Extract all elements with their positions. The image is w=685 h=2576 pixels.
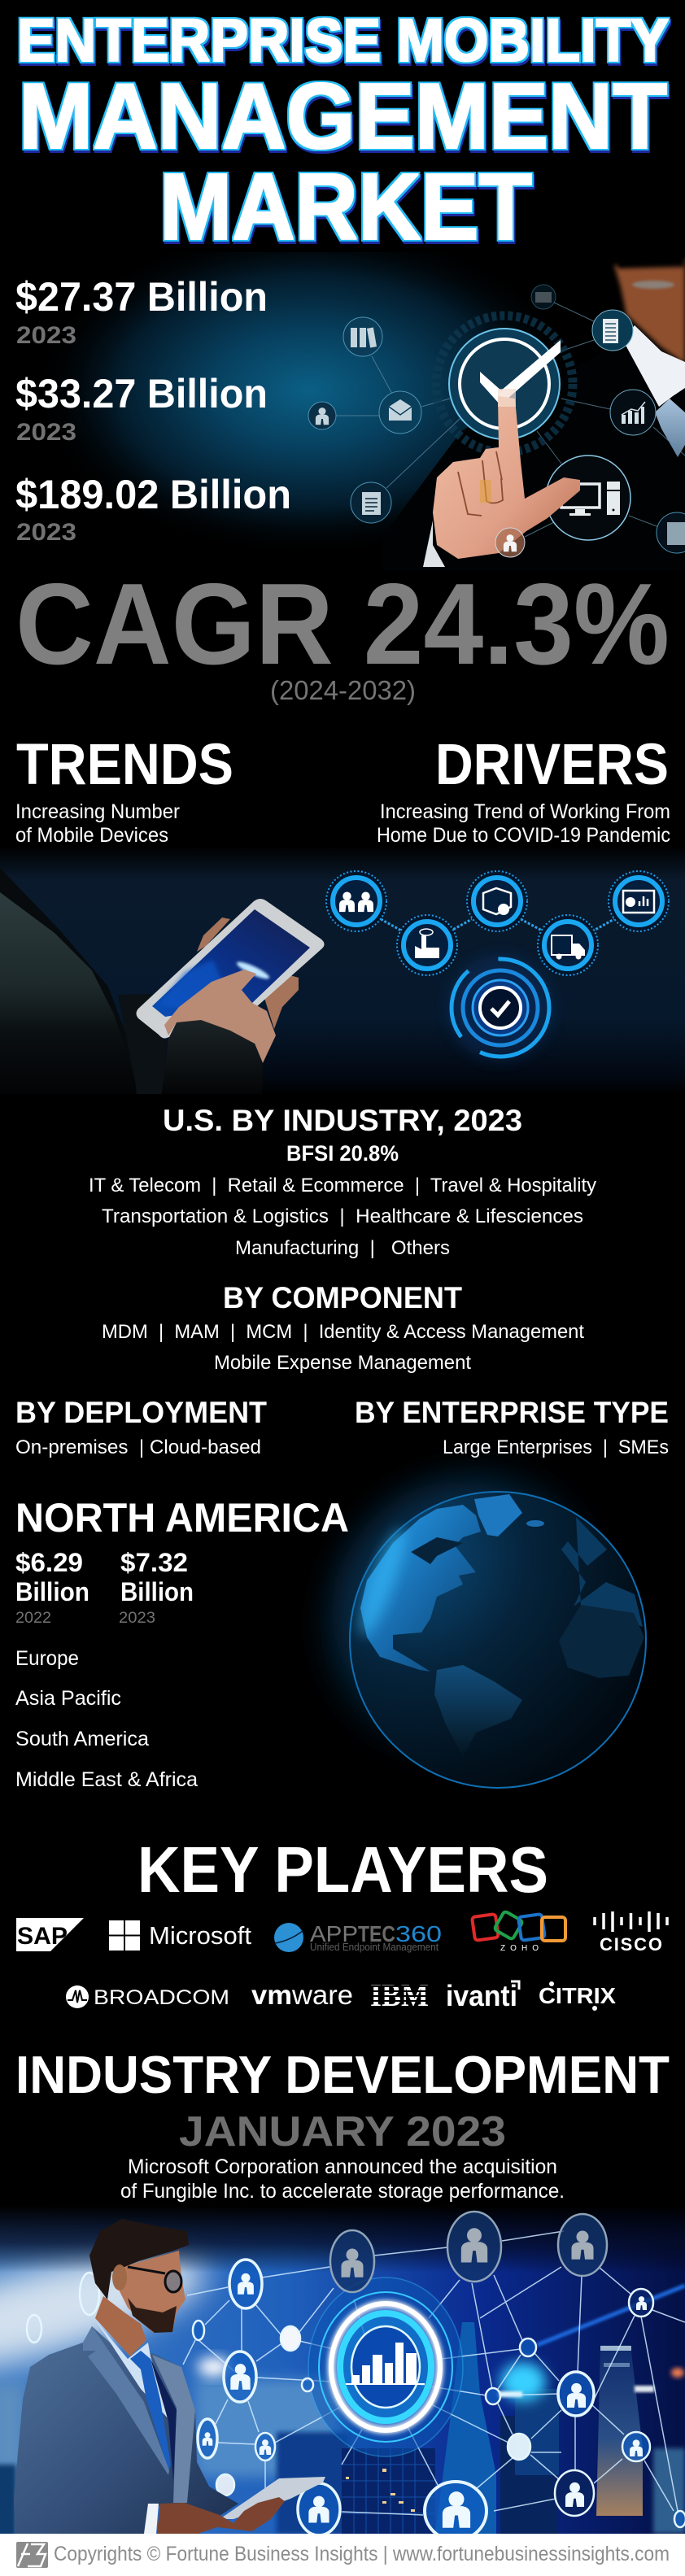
jacket outer band [0,868,140,1098]
hands [157,2497,285,2534]
heading: drivers: Home Due to COVID-19 Pandemic [377,824,670,847]
tablet [137,899,325,1038]
section: U.S. by industry [89,1104,596,1259]
stat: 2032 value: $189.02 Billion [15,472,291,517]
section: north america: 2022 [15,1610,51,1627]
globe [325,1468,659,1802]
trends drivers image [0,846,685,1098]
businessman face [614,252,685,364]
region list [15,1647,198,1791]
logo: SAP: SAP [17,1923,68,1950]
icon: person small [495,528,525,557]
glasses [128,2267,181,2292]
light beam [537,2286,685,2345]
logo: Cisco [595,1911,667,1955]
section: by component: MDM | MAM | MCM | Identity & Access Management [102,1321,584,1343]
icon: clipboard [351,482,391,523]
stat: 2024 value: $33.27 Billion [15,371,268,416]
icon: gear ring [436,316,573,452]
pointing hand and sleeve [161,970,276,1098]
icon: person [308,402,336,429]
network lines [183,2231,685,2515]
continent: North America [360,1505,481,1672]
continent: Greenland [474,1494,522,1536]
footer [0,2534,685,2576]
section: by deployment [15,1396,267,1458]
shirt [95,2320,171,2421]
heading: trends [15,733,233,847]
section: by component: BY COMPONENT [223,1281,462,1314]
logo: Microsoft [109,1920,251,1951]
logo: IBM: IBM [370,1978,429,2013]
region list: Asia Pacific [15,1687,121,1710]
heading: industry development: Microsoft Corporation announced the acquisition [128,2155,557,2178]
section: by enterprise type [355,1396,669,1458]
jacket shoulder [0,892,136,1098]
section: U.S. by industry: Manufacturing | Others [235,1237,450,1259]
heading: drivers: Increasing Trend of Working From [380,800,670,823]
logo: Microsoft: Microsoft [149,1921,251,1950]
icon: check badge [449,329,561,439]
section: by enterprise type: Large Enterprises | SMEs [443,1436,669,1458]
city skyline [0,2322,685,2542]
stat: 2023 value: 2023 [16,322,76,349]
continent: Europe [561,1517,643,1627]
section: north america: Billion [15,1577,89,1606]
tablet [220,2477,325,2519]
businessman shirt [622,325,685,407]
section: U.S. by industry: BFSI 20.8% [286,1141,399,1166]
heading: drivers [377,733,670,847]
region list: Europe [15,1647,79,1670]
icon: chart [610,390,656,435]
section: north america: Billion [120,1577,194,1606]
section: by component: Mobile Expense Management [214,1352,471,1374]
heading: trends: Increasing Number [15,800,180,823]
network lines [335,303,685,537]
section: by deployment: BY DEPLOYMENT [15,1396,267,1429]
logo: Cisco: CISCO [600,1934,662,1955]
title [17,7,669,259]
icon: calendar [531,285,556,309]
logo: Broadcom: BROADCOM [94,1986,229,2009]
dim node persons [342,2228,594,2277]
section: by deployment: On-premises | Cloud-based [15,1436,261,1458]
CAGR heading: (2024-2032) [270,675,416,705]
shirt cuff [144,2504,159,2534]
icon node: package [467,871,527,931]
stat: 2032 value [15,472,291,546]
section: north america: NORTH AMERICA [15,1495,349,1541]
stat: 2024 value [15,371,268,446]
businessman [14,2219,325,2534]
logo: VMware: vm [251,1980,292,2010]
inner sleeve behind tablet [118,994,167,1098]
pointing hand [423,389,580,567]
region list: Middle East & Africa [15,1768,198,1791]
ear [112,2264,127,2291]
neck [95,2296,146,2356]
section: U.S. by industry: IT & Telecom | Retail & Ecommerce | Travel & Hospitality [89,1175,596,1196]
logo: Zoho [472,1911,565,1953]
heading: industry development [15,2045,670,2203]
central chart dial [308,2277,463,2456]
Hudson Bay [411,1537,463,1564]
beard [128,2298,177,2333]
logo: Citrix: CITRIX [539,1983,616,2008]
top dark fade [0,2206,685,2273]
region list: South America [15,1728,149,1750]
section: north america: $6.29 [15,1548,83,1577]
heading: drivers: DRIVERS [435,733,669,797]
face [114,2251,185,2332]
title: MARKET [159,154,532,259]
jacket [14,2326,238,2534]
icon: envelope [379,391,421,434]
stat: 2023 value [15,274,268,349]
right lapel [152,2355,195,2503]
icon: central check gauge [447,954,554,1061]
icon: documents [592,310,633,351]
continent: Iceland [526,1520,544,1527]
logo: AppTec360: Unified Endpoint Management [310,1941,438,1953]
left lapel [83,2326,169,2475]
logo: AppTec360: APP [310,1921,358,1946]
icon node: engineers [326,871,386,931]
heading: trends: of Mobile Devices [15,824,168,847]
hair [89,2219,189,2299]
heading: key players: KEY PLAYERS [137,1833,548,1906]
heading: industry development: JANUARY 2023 [179,2108,506,2155]
stat: 2032 value: 2023 [16,519,76,546]
logo: VMware [251,1980,353,2010]
logo: AppTec360: 360 [395,1921,442,1946]
logo: SAP [16,1918,84,1951]
section: U.S. by industry: Transportation & Logistics | Healthcare & Lifesciences [102,1205,583,1227]
logo: AppTec360 [274,1921,442,1953]
icon node: delivery truck [538,915,598,975]
section: north america [15,1495,349,1627]
section: by component [102,1281,584,1374]
icon: binders [343,317,382,356]
stat: 2024 value: 2023 [16,419,76,446]
icon: Fortune Business Insights logo [16,2542,48,2568]
logo: Zoho: ZOHO [500,1944,539,1953]
logo: Ivanti: ivanti [446,1979,517,2012]
tie [130,2351,171,2470]
icon: computer [546,455,630,540]
section: north america: $7.32 [120,1548,188,1577]
continent: Africa [559,1605,644,1678]
title: MANAGEMENT [19,65,667,168]
icon node: dashboard [609,871,669,931]
suit sleeve and torso [393,427,533,523]
hand behind tablet [197,918,299,1029]
icon node: factory [397,915,457,975]
logo: VMware: ware [291,1980,353,2010]
icon: clipboard right [657,512,685,553]
logo: AppTec360: TEC [358,1921,395,1946]
businessman tie [655,399,685,457]
hero image: hand touching network icons [68,252,685,567]
heading: industry development: INDUSTRY DEVELOPMENT [15,2045,670,2104]
stat: 2023 value: $27.37 Billion [15,274,268,320]
inner jacket shadow [151,2359,177,2481]
continent: South America [434,1665,522,1757]
section: north america: 2023 [119,1610,155,1627]
sky streak [0,2230,216,2395]
network connectors [381,919,614,931]
heading: industry development: of Fungible Inc. to accelerate storage performance. [120,2180,565,2203]
dim upper nodes [330,2212,607,2292]
bright network nodes [27,2260,685,2540]
bottom image: businessman and network [0,2206,685,2542]
heading: trends: TRENDS [16,733,233,797]
section: by enterprise type: BY ENTERPRISE TYPE [355,1396,669,1429]
section: U.S. by industry: U.S. BY INDUSTRY, 2023 [163,1104,522,1137]
bright node persons [203,2273,647,2528]
